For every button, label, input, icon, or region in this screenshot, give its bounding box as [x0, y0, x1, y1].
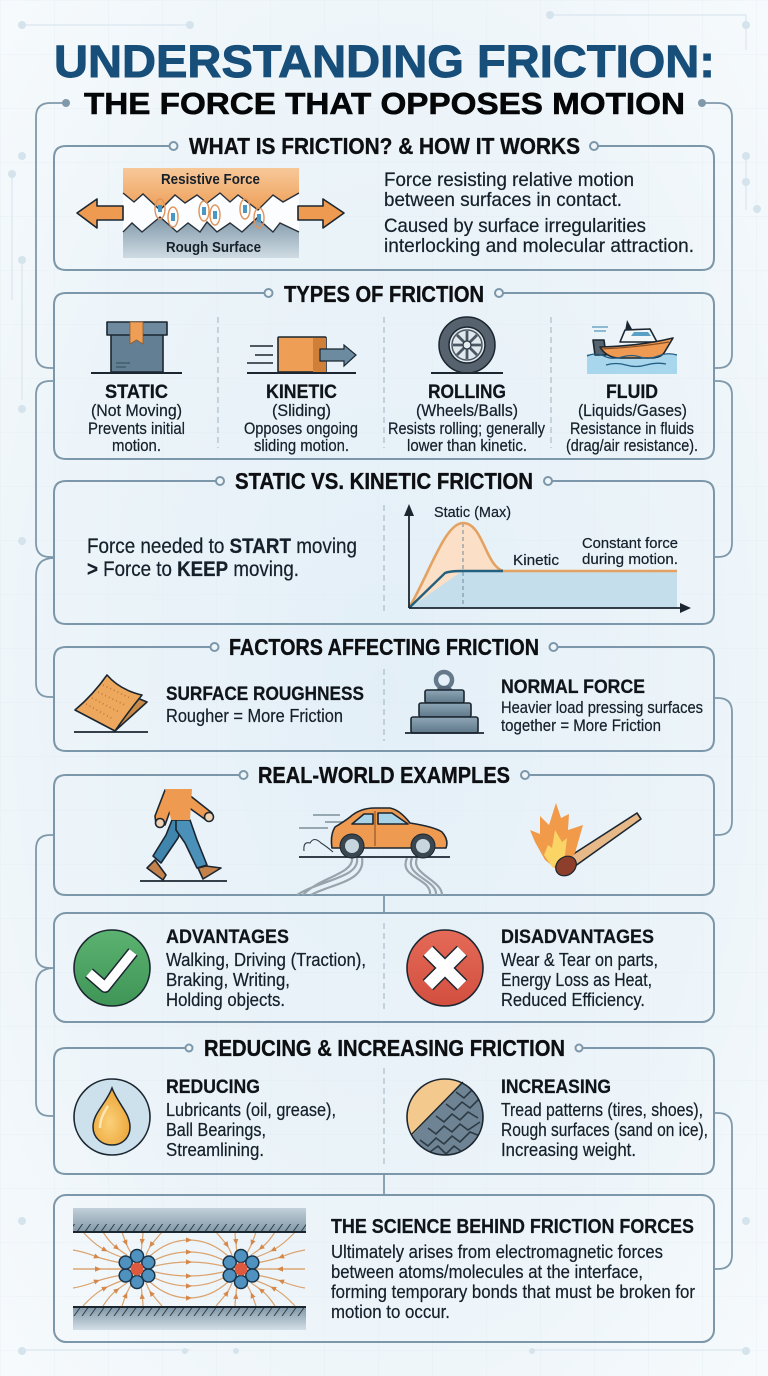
icon: skidding car	[297, 808, 450, 895]
type: kinetic: (Sliding)	[272, 402, 331, 420]
heading: examples: REAL-WORLD EXAMPLES	[258, 762, 510, 788]
heading: static vs kinetic: STATIC VS. KINETIC FRICTION	[235, 468, 533, 494]
panel: types of friction	[54, 281, 714, 459]
panel: advantages and disadvantages	[54, 913, 714, 1022]
type: fluid	[566, 320, 698, 455]
icon: tread on sand	[406, 1078, 484, 1156]
science text: THE SCIENCE BEHIND FRICTION FORCES	[331, 1215, 694, 1238]
diagram: interlocking surfaces: Resistive Force	[161, 172, 260, 188]
text: definition: interlocking and molecular attraction.	[384, 235, 694, 257]
type: kinetic: Opposes ongoing	[244, 420, 358, 438]
type: kinetic: sliding motion.	[254, 437, 349, 455]
increasing text	[501, 1076, 708, 1160]
science text: between atoms/molecules at the interface,	[331, 1262, 643, 1282]
advantages text: Walking, Driving (Traction),	[166, 950, 366, 970]
heading: what is friction: WHAT IS FRICTION? & HOW IT WORKS	[189, 133, 580, 159]
disadvantages text: DISADVANTAGES	[501, 926, 654, 948]
panel: what is friction	[54, 133, 714, 270]
icon: burning match	[530, 803, 641, 880]
text: definition: Force resisting relative motion	[384, 169, 634, 191]
icon: oil drop	[74, 1079, 150, 1155]
type: kinetic: KINETIC	[266, 381, 337, 403]
type: fluid: FLUID	[606, 381, 658, 403]
type: fluid: (Liquids/Gases)	[578, 402, 687, 420]
science text: Ultimately arises from electromagnetic forces	[331, 1242, 663, 1262]
panel: factors	[54, 634, 714, 751]
reducing text: Ball Bearings,	[166, 1120, 266, 1140]
diagram: interlocking surfaces: Rough Surface	[166, 240, 261, 256]
text: definition: between surfaces in contact.	[384, 189, 622, 211]
increasing text: Tread patterns (tires, shoes),	[501, 1100, 703, 1120]
advantages text: Holding objects.	[166, 990, 285, 1010]
diagram: electromagnetic field between atoms	[73, 1208, 306, 1330]
text: comparison	[87, 535, 357, 581]
type: kinetic	[244, 337, 358, 455]
icon: walking person	[140, 789, 227, 881]
title	[54, 36, 715, 121]
heading: types: TYPES OF FRICTION	[284, 281, 484, 307]
text: definition	[384, 169, 694, 257]
science text: forming temporary bonds that must be broken for	[331, 1282, 695, 1302]
factor: surface roughness	[166, 684, 364, 726]
panel: static vs kinetic	[54, 468, 714, 624]
science text: motion to occur.	[331, 1302, 450, 1322]
increasing text: Rough surfaces (sand on ice),	[501, 1120, 708, 1140]
type: static	[88, 322, 185, 455]
disadvantages text: Energy Loss as Heat,	[501, 970, 652, 990]
icon: sandpaper	[74, 675, 148, 732]
type: rolling: (Wheels/Balls)	[416, 402, 518, 420]
factor: normal force	[501, 677, 703, 735]
chart: static and kinetic force: during motion.	[582, 551, 678, 568]
reducing text	[166, 1076, 336, 1160]
increasing text: INCREASING	[501, 1076, 611, 1098]
science text	[331, 1215, 695, 1322]
icon: weight	[405, 672, 484, 733]
factor: normal force: NORMAL FORCE	[501, 677, 645, 698]
factor: surface roughness: Rougher = More Friction	[166, 706, 343, 726]
disadvantages text	[501, 926, 658, 1010]
connector lines	[36, 99, 732, 1269]
icon: check mark	[74, 930, 150, 1006]
panel: reducing and increasing	[54, 1035, 714, 1174]
panel: the science	[54, 1195, 714, 1342]
heading: factors: FACTORS AFFECTING FRICTION	[229, 634, 539, 660]
factor: normal force: together = More Friction	[501, 717, 661, 735]
reducing text: Streamlining.	[166, 1140, 264, 1160]
reducing text: REDUCING	[166, 1076, 260, 1098]
advantages text: ADVANTAGES	[166, 926, 289, 948]
diagram: interlocking surfaces	[77, 168, 344, 258]
text: definition: Caused by surface irregularities	[384, 215, 646, 237]
advantages text: Braking, Writing,	[166, 970, 290, 990]
factor: surface roughness: SURFACE ROUGHNESS	[166, 684, 364, 705]
type: rolling	[388, 317, 546, 455]
increasing text: Increasing weight.	[501, 1140, 636, 1160]
chart: static and kinetic force: Static (Max)	[434, 504, 511, 521]
title: THE FORCE THAT OPPOSES MOTION	[84, 86, 685, 121]
text: comparison: Force needed to START moving	[87, 535, 357, 558]
type: fluid: (drag/air resistance).	[566, 437, 698, 455]
chart: static and kinetic force: Constant force	[582, 535, 678, 552]
type: static: STATIC	[105, 381, 168, 403]
type: rolling: Resists rolling; generally	[388, 420, 546, 438]
disadvantages text: Wear & Tear on parts,	[501, 950, 658, 970]
type: static: motion.	[112, 437, 161, 455]
chart: static and kinetic force: Kinetic	[513, 552, 560, 569]
disadvantages text: Reduced Efficiency.	[501, 990, 645, 1010]
heading: reducing and increasing: REDUCING & INCREASING FRICTION	[204, 1035, 565, 1061]
text: comparison: > Force to KEEP moving.	[87, 558, 299, 581]
reducing text: Lubricants (oil, grease),	[166, 1100, 336, 1120]
type: fluid: Resistance in fluids	[570, 420, 694, 438]
type: rolling: lower than kinetic.	[407, 437, 527, 455]
advantages text	[166, 926, 366, 1010]
type: rolling: ROLLING	[428, 381, 506, 403]
panel: real-world examples	[54, 762, 714, 895]
title: UNDERSTANDING FRICTION:	[54, 36, 715, 87]
chart: static and kinetic force	[404, 504, 691, 613]
icon: cross mark	[407, 930, 483, 1006]
factor: normal force: Heavier load pressing surfaces	[501, 699, 703, 717]
type: static: (Not Moving)	[91, 402, 182, 420]
type: static: Prevents initial	[88, 420, 185, 438]
